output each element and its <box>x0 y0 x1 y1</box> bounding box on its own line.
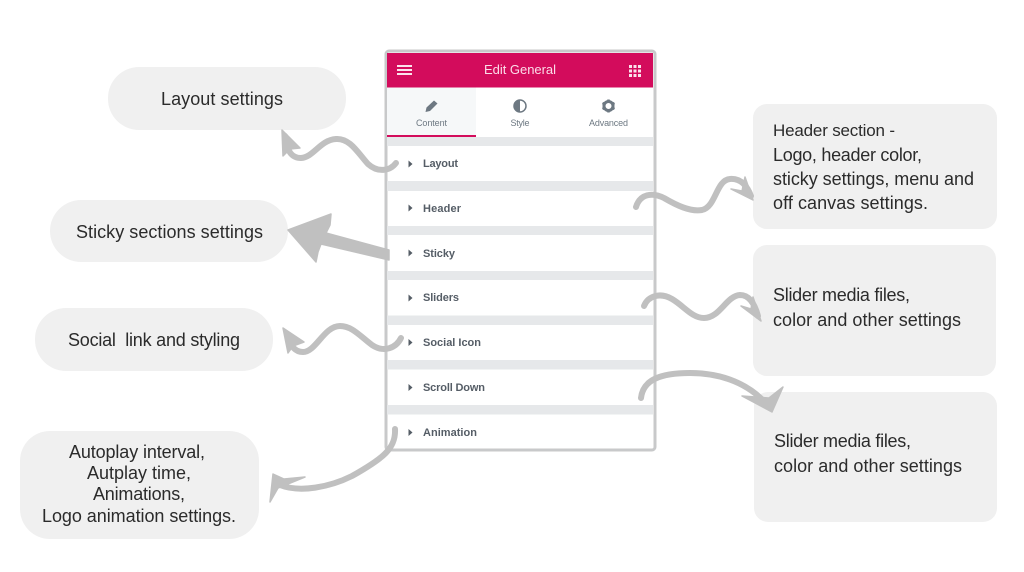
callout: Slider media files second: color and other settings <box>774 456 962 476</box>
icon: pencil <box>426 100 438 112</box>
tab: Advanced <box>589 100 628 128</box>
icon: apps grid <box>629 65 641 77</box>
tab label: Content: Content <box>416 118 447 128</box>
callout: Autoplay and animation settings <box>20 431 259 539</box>
callout: Sticky sections settings: Sticky sections settings <box>76 222 263 242</box>
callout: Slider media files second <box>754 392 997 522</box>
panel header bar <box>387 53 653 88</box>
row: Header: Header <box>423 203 462 215</box>
callout: Autoplay and animation settings: Logo animation settings. <box>42 506 236 526</box>
panel title: Edit General <box>484 62 556 77</box>
arrow: Layout row to Layout settings <box>282 130 396 170</box>
callout: Layout settings <box>108 67 346 130</box>
row: Sticky <box>408 248 456 260</box>
callout: Slider media files: color and other settings <box>773 310 961 330</box>
callout: Header section: off canvas settings. <box>773 193 928 213</box>
icon: half circle <box>514 100 526 112</box>
arrow: Sticky row to Sticky sections settings <box>288 214 389 262</box>
row: Layout: Layout <box>423 158 458 170</box>
callout: Autoplay and animation settings: Autoplay interval, <box>69 442 205 462</box>
arrow: Header row to Header section <box>636 177 753 210</box>
callout: Autoplay and animation settings: Autplay time, <box>87 463 191 483</box>
arrow: Animation row to Autoplay settings <box>270 429 395 502</box>
arrow: Social Icon row to Social link <box>283 326 401 353</box>
callout: Sticky sections settings <box>50 200 288 262</box>
callout: Header section: Header section - <box>773 121 895 140</box>
callout: Header section <box>753 104 997 229</box>
callout: Slider media files: Slider media files, <box>773 285 910 305</box>
callout: Header section: Logo, header color, <box>773 145 922 165</box>
callout: Layout settings: Layout settings <box>161 89 283 109</box>
callout: Social link and styling <box>35 308 273 371</box>
row: Scroll Down: Scroll Down <box>423 382 485 394</box>
arrow: Sliders row to Slider media files <box>644 295 761 321</box>
callout: Header section: sticky settings, menu and <box>773 169 974 189</box>
tab: Content <box>387 88 476 137</box>
icon: gear <box>602 100 614 112</box>
row: Animation: Animation <box>423 427 477 439</box>
icon: hamburger menu <box>397 65 412 75</box>
row: Social Icon: Social Icon <box>423 337 481 349</box>
panel: Edit General widget <box>386 51 655 450</box>
tab label: Style: Style <box>510 118 530 128</box>
tab label: Advanced: Advanced <box>589 118 628 128</box>
callout: Autoplay and animation settings: Animations, <box>93 484 185 504</box>
tab: Style <box>510 100 530 128</box>
arrow: Scroll Down row to second Slider media files <box>641 373 783 412</box>
row: Sticky: Sticky <box>423 248 456 260</box>
callout: Social link and styling: Social link and styling <box>68 330 240 350</box>
callout: Slider media files <box>753 245 996 376</box>
callout: Slider media files second: Slider media files, <box>774 431 911 451</box>
row: Sliders: Sliders <box>423 292 459 304</box>
